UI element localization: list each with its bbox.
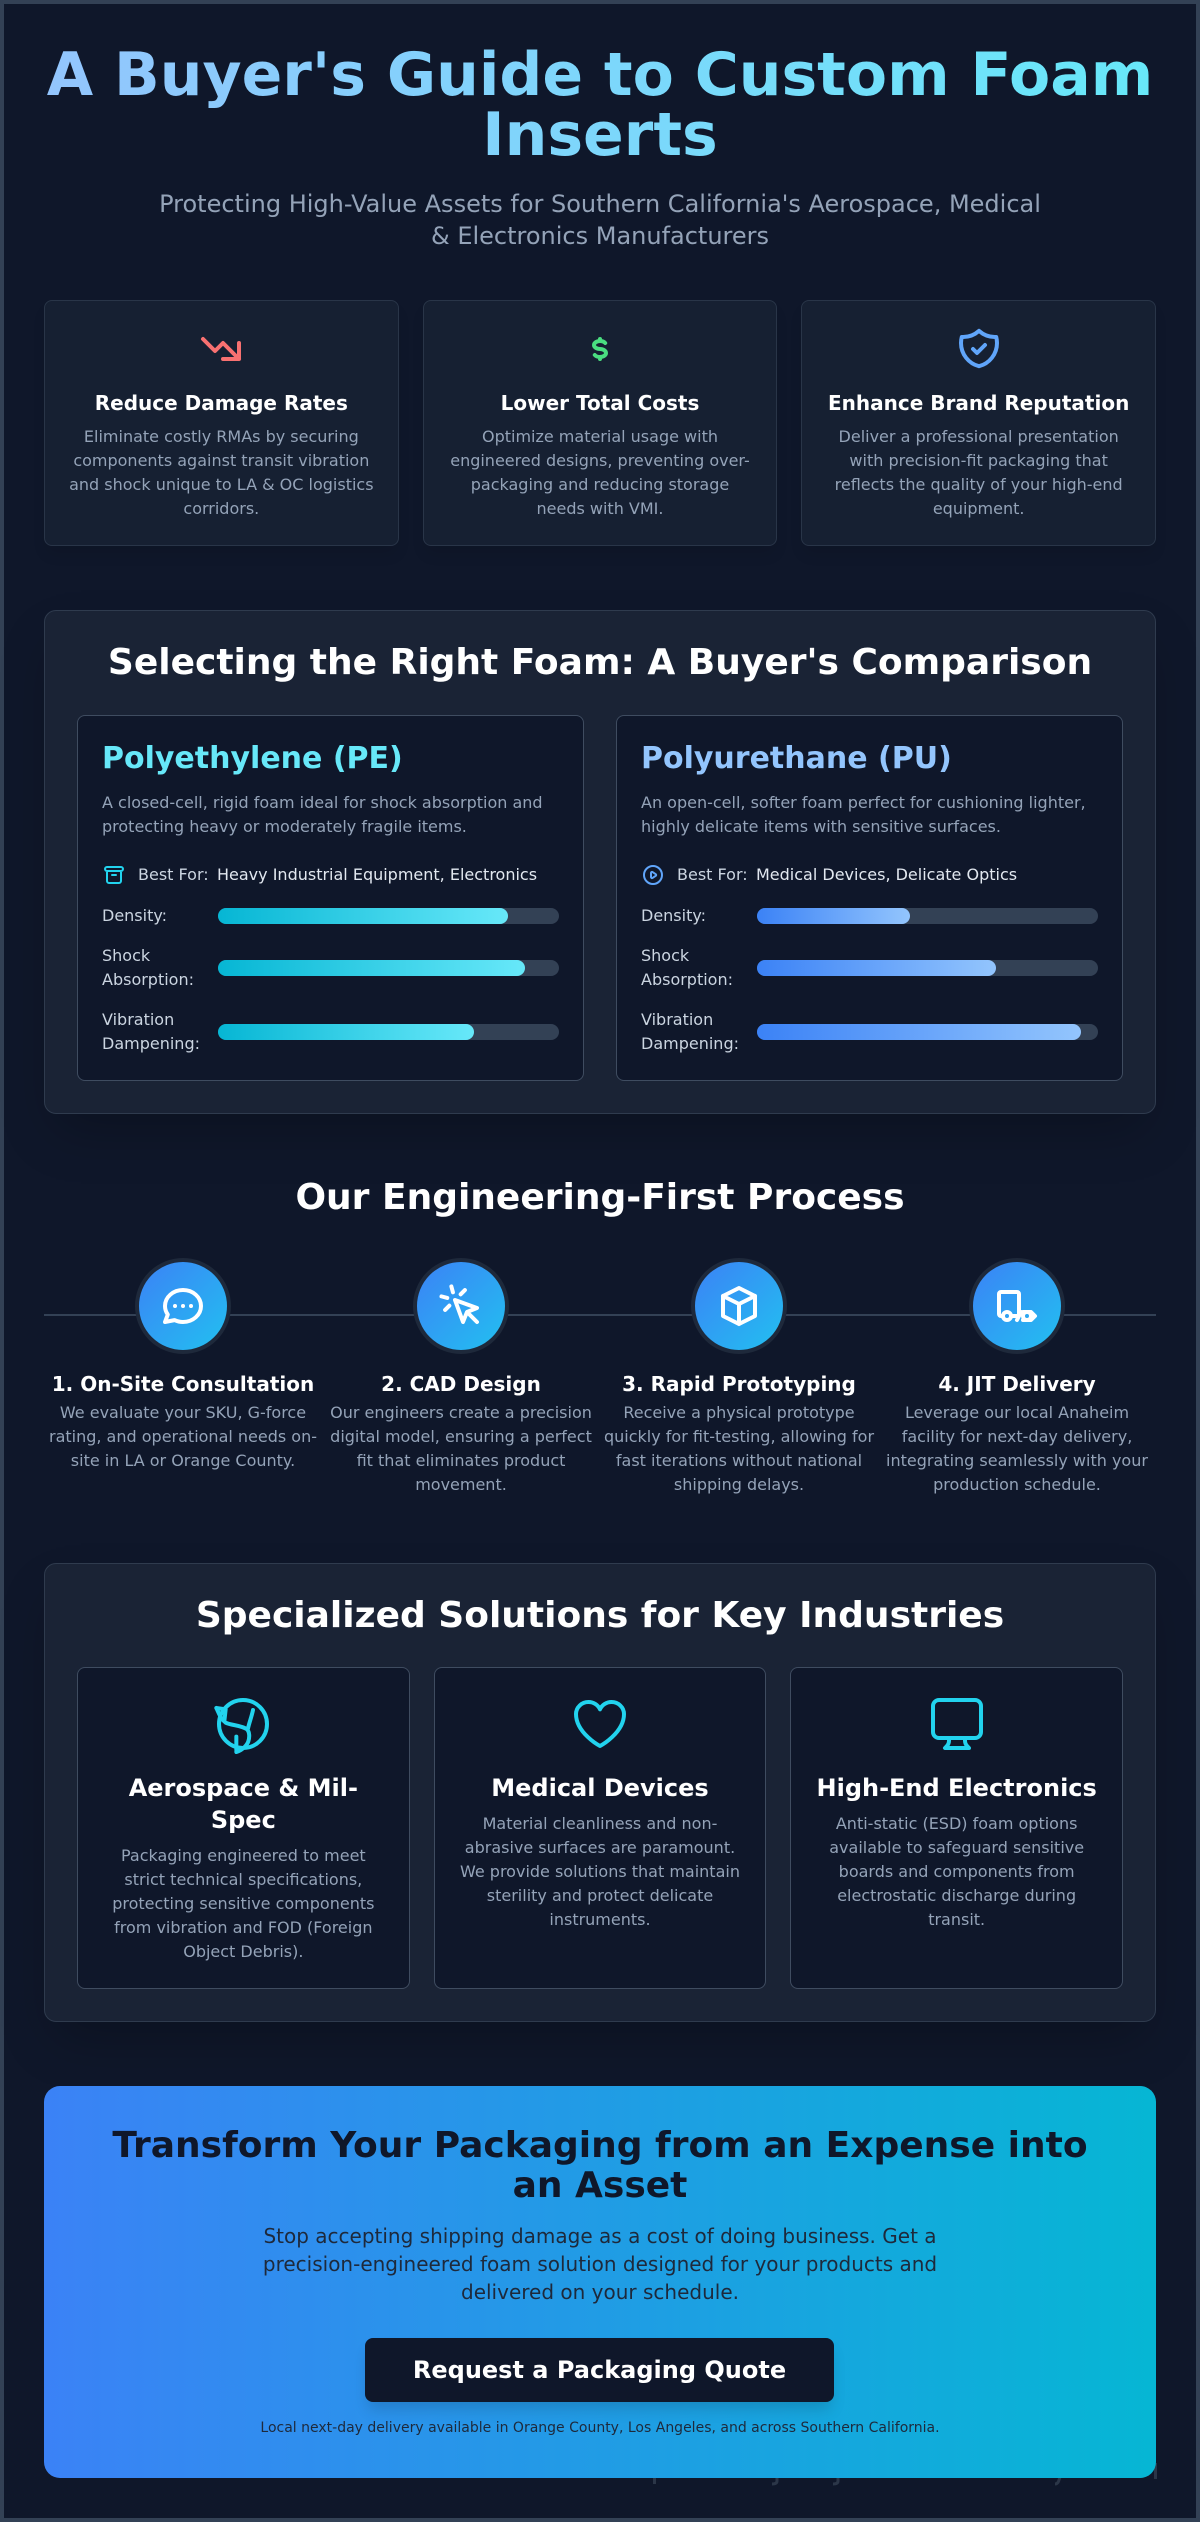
title: A Buyer's Guide to Custom Foam [47,40,1153,110]
subtitle: Protecting High-Value Assets for Southern California's Aerospace, Medical [159,190,1041,218]
icon: play circle [643,865,663,885]
label: shock absorption: Shock [102,946,150,965]
text: step 2: fit that eliminates product [357,1451,565,1470]
panel: aerospace [77,1667,410,1989]
text: aerospace: Packaging engineered to meet [121,1846,366,1865]
heading: step 2: 2. CAD Design [381,1372,541,1396]
heading: industries: Specialized Solutions for Key Industries [196,1595,1004,1636]
text: lower total costs: packaging and reducing storage [471,475,729,494]
text: step 4: facility for next-day delivery, [902,1427,1132,1446]
icon: dollar sign [592,337,608,361]
heading: reduce damage rates: Reduce Damage Rates [95,391,348,415]
label: vibration dampening: Vibration [641,1010,713,1029]
best for row: polyurethane: Medical Devices, Delicate Optics [756,865,1017,884]
heading: aerospace [128,1774,358,1834]
text: call to action [263,2224,937,2304]
text: call to action: delivered on your schedule. [461,2280,739,2304]
panel: medical [434,1667,766,1989]
title [44,45,1156,165]
title: Inserts [482,100,718,170]
best for row: polyethylene: Best For: [138,865,209,884]
text: step 3: fast iterations without national [616,1451,862,1470]
text: enhance brand reputation: equipment. [933,499,1024,518]
text: reduce damage rates [69,427,374,518]
text: medical: instruments. [549,1910,651,1929]
button: request quote [365,2338,834,2402]
text: electronics: Anti-static (ESD) foam options [836,1814,1077,1833]
label: shock absorption: Shock [641,946,689,965]
text: reduce damage rates: components against transit vibration [73,451,369,470]
heading: call to action: Transform Your Packaging from an Expense into [112,2125,1088,2166]
text: aerospace: strict technical specifications, [124,1870,362,1889]
heading: step 3: 3. Rapid Prototyping [622,1372,856,1396]
panel: call to action [44,2086,1156,2478]
heading: call to action: an Asset [513,2165,687,2206]
heading: aerospace: Spec [211,1806,276,1834]
text: step 1: We evaluate your SKU, G-force [60,1403,306,1422]
text: step 4 [886,1403,1148,1494]
text: step 3: Receive a physical prototype [623,1403,855,1422]
bar: density 85 percent [218,908,559,924]
heading: step 4: 4. JIT Delivery [938,1372,1096,1396]
text: step 1: rating, and operational needs on- [49,1427,317,1446]
subtitle: & Electronics Manufacturers [431,222,769,250]
text: polyethylene description: A closed-cell, rigid foam ideal for shock absorption and [102,793,543,812]
text: polyethylene description: protecting heavy or moderately fragile items. [102,817,467,836]
label: shock absorption [641,946,733,989]
heading: foam comparison: Selecting the Right Foam: A Buyer's Comparison [108,642,1092,683]
text: medical: We provide solutions that maintain [460,1862,740,1881]
text: step 4: integrating seamlessly with your [886,1451,1148,1470]
icon: archive box [104,866,124,884]
panel: foam comparison background [44,610,1156,1114]
subtitle [159,190,1041,250]
text: lower total costs: engineered designs, preventing over- [450,451,750,470]
step 4: delivery [886,1258,1148,1494]
text: reduce damage rates: corridors. [183,499,259,518]
text: electronics: available to safeguard sensitive [829,1838,1084,1857]
bar: shock absorption 70 percent [757,960,1098,976]
text: step 4: production schedule. [933,1475,1101,1494]
heading: enhance brand reputation: Enhance Brand Reputation [828,391,1129,415]
text: call to action: precision-engineered foam solution designed for your products and [263,2252,937,2276]
label: vibration dampening: Vibration [102,1010,174,1029]
text: enhance brand reputation [835,427,1123,518]
best for row: polyethylene: Heavy Industrial Equipment, Electronics [217,865,537,884]
text: step 2: Our engineers create a precision [330,1403,592,1422]
text: step 3 [604,1403,874,1494]
bar: vibration dampening 75 percent [218,1024,559,1040]
text: reduce damage rates: Eliminate costly RMAs by securing [84,427,359,446]
panel: polyethylene [77,715,584,1081]
text: aerospace [112,1846,374,1961]
text: aerospace: from vibration and FOD (Foreign [114,1918,373,1937]
text: electronics [829,1814,1084,1929]
label: density: Density: [641,906,706,925]
panel: enhance brand reputation [801,300,1156,546]
button: request quote: Request a Packaging Quote [413,2356,786,2384]
icon: cursor click [413,1258,509,1354]
heading: step 1: 1. On-Site Consultation [52,1372,314,1396]
text: polyurethane description [641,793,1086,836]
text: medical [460,1814,740,1929]
heading: electronics: High-End Electronics [816,1774,1097,1802]
icon: cube [691,1258,787,1354]
text: polyurethane description: An open-cell, softer foam perfect for cushioning lighter, [641,793,1086,812]
icon: trending down arrow [200,336,242,362]
text: step 4: Leverage our local Anaheim [905,1403,1129,1422]
icon: truck [969,1258,1065,1354]
text: medical: sterility and protect delicate [487,1886,713,1905]
label: density: Density: [102,906,167,925]
best for row: polyurethane [643,865,1017,885]
text: medical: Material cleanliness and non- [483,1814,717,1833]
heading: lower total costs: Lower Total Costs [501,391,699,415]
text: reduce damage rates: and shock unique to LA & OC logistics [69,475,374,494]
icon: heart [574,1700,626,1748]
label: shock absorption: Absorption: [102,970,194,989]
text: step 1 [49,1403,317,1470]
text: aerospace: protecting sensitive components [112,1894,374,1913]
text: medical: abrasive surfaces are paramount. [465,1838,735,1857]
text: electronics: transit. [928,1910,985,1929]
text: electronics: boards and components from [839,1862,1075,1881]
text: enhance brand reputation: with precision-fit packaging that [849,451,1108,470]
heading: aerospace: Aerospace & Mil- [129,1774,358,1802]
text: step 2: digital model, ensuring a perfect [330,1427,592,1446]
icon: chat bubble [135,1258,231,1354]
panel: reduce damage rates [44,300,399,546]
text: step 3: shipping delays. [674,1475,804,1494]
bar: shock absorption 90 percent [218,960,559,976]
text: lower total costs: needs with VMI. [536,499,663,518]
step 2: cad design [330,1258,592,1494]
heading: polyethylene: Polyethylene (PE) [102,741,403,776]
heading: call to action [112,2125,1088,2206]
text: polyurethane description: highly delicate items with sensitive surfaces. [641,817,1001,836]
text: call to action: Stop accepting shipping damage as a cost of doing business. Get a [263,2224,937,2248]
text: aerospace: Object Debris). [183,1942,303,1961]
text: enhance brand reputation: Deliver a professional presentation [839,427,1119,446]
text: step 2: movement. [415,1475,507,1494]
text: polyethylene description [102,793,543,836]
text: enhance brand reputation: reflects the quality of your high-end [835,475,1123,494]
panel: polyurethane [616,715,1123,1081]
panel: lower total costs [423,300,777,546]
text: step 2 [330,1403,592,1494]
text: step 1: site in LA or Orange County. [71,1451,295,1470]
label: vibration dampening: Dampening: [641,1034,739,1053]
text: lower total costs [450,427,750,518]
best for row: polyurethane: Best For: [677,865,748,884]
panel: industries background [44,1563,1156,2022]
label: shock absorption [102,946,194,989]
bar: density 45 percent [757,908,1098,924]
heading: polyurethane: Polyurethane (PU) [641,741,952,776]
text: lower total costs: Optimize material usage with [482,427,718,446]
text: electronics: electrostatic discharge during [837,1886,1076,1905]
text: delivery note: Local next-day delivery available in Orange County, Los Angeles, and across Southern California. [260,2420,940,2436]
heading: process: Our Engineering-First Process [295,1177,905,1218]
heading: medical: Medical Devices [491,1774,709,1802]
icon: shield check [959,328,999,368]
icon: monitor [931,1698,983,1750]
bar: vibration dampening 95 percent [757,1024,1098,1040]
panel: electronics [790,1667,1123,1989]
label: vibration dampening: Dampening: [102,1034,200,1053]
icon: globe [214,1698,269,1754]
label: vibration dampening [641,1010,739,1053]
label: shock absorption: Absorption: [641,970,733,989]
text: step 3: quickly for fit-testing, allowing for [604,1427,874,1446]
step 1: consultation [49,1258,317,1470]
step 3: prototyping [604,1258,874,1494]
label: vibration dampening [102,1010,200,1053]
